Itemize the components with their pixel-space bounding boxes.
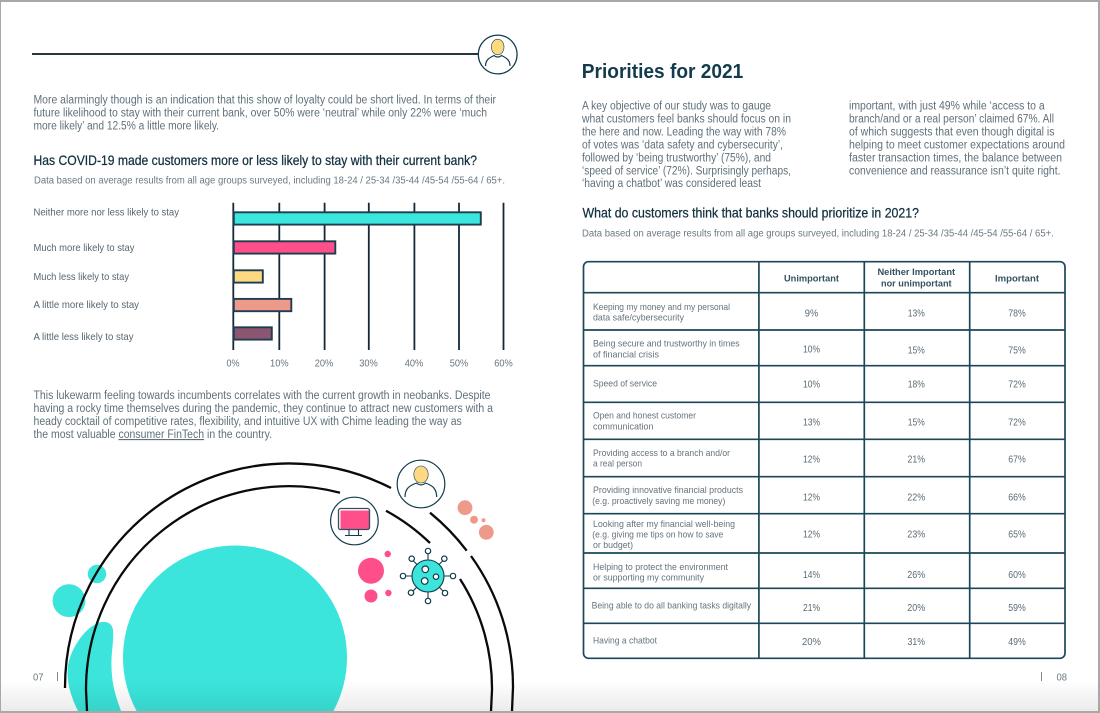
row: financial well-being: 65%	[1008, 528, 1026, 540]
row: innovative products: 66%	[1008, 492, 1026, 504]
body text column 1: of votes was ‘data safety and cybersecurity’,	[582, 139, 783, 151]
bar: little less	[234, 327, 272, 340]
row: digital tasks: Being able to do all banking tasks digitally	[592, 600, 751, 611]
row: branch access: Providing access to a branch and/or	[593, 448, 730, 459]
table header: Important	[995, 274, 1040, 284]
bar chart	[34, 203, 513, 369]
row: financial well-being: 12%	[803, 528, 820, 540]
body text column 1: followed by ‘being trustworthy’ (75%), and	[582, 152, 771, 164]
closing paragraph: heady cocktail of competitive rates, flexibility, and intuitive UX with Chime leading the way as	[34, 416, 462, 428]
closing paragraph: the most valuable consumer FinTech in the country.	[34, 429, 272, 441]
axis labels: 30%	[359, 357, 378, 369]
salmon dots	[458, 500, 494, 540]
row: environment: 26%	[907, 569, 925, 581]
category labels: Much less likely to stay	[34, 271, 130, 283]
inner orbit	[86, 486, 492, 711]
row: communication: 13%	[803, 416, 820, 428]
row: financial well-being	[592, 519, 1026, 551]
row: speed	[593, 378, 1026, 390]
row: communication	[593, 411, 1026, 432]
icon: person	[397, 460, 445, 508]
row: digital tasks: 20%	[907, 602, 925, 614]
row: environment: 14%	[803, 569, 820, 581]
row: trustworthy: 75%	[1008, 345, 1026, 357]
row: communication: 15%	[908, 416, 925, 428]
row: data safety: data safe/cybersecurity	[593, 312, 684, 323]
body text column 1	[581, 100, 791, 190]
row: branch access	[593, 448, 1026, 470]
row: chatbot: Having a chatbot	[593, 635, 657, 646]
body text column 2: of which suggests that even though digital is	[849, 126, 1055, 138]
row: branch access: 21%	[908, 454, 925, 466]
body text column 2: helping to meet customer expectations around	[849, 139, 1065, 151]
row: speed: 10%	[803, 378, 820, 390]
axis labels: 40%	[405, 357, 423, 369]
intro paragraph: future likelihood to stay with their current bank, over 50% were ‘neutral’ while only 22% were ‘much	[34, 108, 487, 120]
row: data safety: 13%	[908, 308, 925, 320]
row: trustworthy	[593, 338, 1026, 360]
body text column 1: ‘having a chatbot’ was considered least	[582, 178, 762, 190]
row: branch access: 67%	[1008, 454, 1026, 466]
row: speed: 72%	[1008, 378, 1026, 390]
teal blob	[67, 622, 121, 711]
row: innovative products: Providing innovative financial products	[593, 485, 743, 496]
row: data safety: 78%	[1008, 308, 1026, 320]
page number right: 08	[1056, 672, 1067, 683]
table header: Unimportant	[784, 274, 840, 284]
small teal circles	[53, 565, 106, 617]
icon: person in circle	[478, 35, 517, 74]
row: chatbot: 49%	[1008, 636, 1026, 648]
body text column 2: important, with just 49% while ‘access to a	[849, 100, 1045, 112]
body text column 1: ‘speed of service’ (72%). Surprisingly perhaps,	[582, 165, 791, 177]
pink dots	[358, 551, 392, 602]
category labels: A little more likely to stay	[34, 299, 140, 311]
axis labels: 0%	[226, 357, 240, 369]
row: trustworthy: Being secure and trustworthy in times	[593, 338, 740, 349]
category labels: Neither more nor less likely to stay	[34, 206, 180, 218]
row: digital tasks: 21%	[803, 602, 820, 614]
axis labels: 10%	[270, 357, 289, 369]
row: environment: 60%	[1008, 569, 1026, 581]
row: environment	[593, 562, 1026, 583]
row: innovative products: 22%	[907, 492, 925, 504]
row: data safety: 9%	[805, 308, 818, 320]
row: chatbot: 20%	[802, 636, 821, 648]
icon: monitor	[331, 497, 378, 545]
body text column 2: faster transaction times, the balance between	[849, 152, 1062, 164]
row: data safety	[593, 302, 1026, 323]
bar: much less	[234, 270, 263, 283]
axis labels: 50%	[450, 357, 468, 369]
table header: nor unimportant	[881, 278, 952, 290]
row: speed: Speed of service	[593, 379, 657, 390]
row: innovative products: 12%	[803, 492, 820, 504]
row: financial well-being: or budget)	[593, 540, 633, 551]
row: trustworthy: of financial crisis	[593, 349, 659, 360]
body text column 1: what customers feel banks should focus on in	[581, 114, 791, 126]
body text column 2: branch/and or a real person’ claimed 67%. All	[849, 114, 1054, 126]
row: environment: or supporting my community	[593, 572, 704, 583]
intro paragraph: more likely’ and 12.5% a little more likely.	[34, 120, 219, 132]
row: innovative products	[592, 485, 1026, 507]
axis labels	[226, 357, 513, 369]
row: communication: 72%	[1008, 416, 1026, 428]
chart heading: Has COVID-19 made customers more or less likely to stay with their current bank?	[34, 152, 477, 168]
category labels: A little less likely to stay	[34, 331, 134, 343]
row: environment: Helping to protect the environment	[593, 562, 728, 573]
closing paragraph: having a rocky time themselves during the pandemic, they continue to attract new customers with a	[34, 403, 494, 415]
row: chatbot	[593, 635, 1026, 648]
body text column 2	[849, 100, 1065, 177]
row: digital tasks: 59%	[1008, 602, 1026, 614]
table header	[784, 267, 1040, 290]
page number left: 07	[33, 672, 44, 683]
row: trustworthy: 15%	[908, 345, 925, 357]
row: speed: 18%	[908, 378, 925, 390]
category labels: Much more likely to stay	[34, 242, 135, 254]
large teal circle	[123, 546, 347, 711]
body text column 2: convenience and reassurance isn’t quite right.	[849, 165, 1060, 177]
axis labels: 60%	[494, 357, 513, 369]
row: innovative products: (e.g. proactively saving me money)	[592, 496, 725, 507]
bar: little more	[234, 299, 291, 311]
closing paragraph: This lukewarm feeling towards incumbents correlates with the current growth in neobanks. Despite	[34, 390, 490, 402]
page number left	[33, 672, 58, 683]
panel: left page	[32, 35, 517, 711]
row: trustworthy: 10%	[803, 344, 820, 356]
bar: neither	[234, 212, 481, 225]
header rule with person icon	[32, 35, 517, 74]
table header: Neither Important	[877, 267, 956, 278]
body text column 1: the here and now. Leading the way with 78%	[582, 126, 786, 138]
table subheading: Data based on average results from all age groups surveyed, including 18-24 / 25-34 /35-44 /45-54 /55-64 / 65+.	[582, 228, 1054, 239]
row: branch access: a real person	[593, 459, 642, 470]
title: Priorities for 2021	[582, 61, 743, 83]
row: communication: communication	[593, 421, 654, 432]
icon: virus	[400, 548, 456, 604]
row: communication: Open and honest customer	[593, 411, 696, 422]
illustration: orbiting circles	[53, 460, 513, 711]
bar: much more	[234, 241, 335, 254]
closing paragraph	[34, 390, 494, 441]
outer orbit	[65, 463, 513, 711]
table grid	[584, 262, 1065, 658]
table heading: What do customers think that banks should prioritize in 2021?	[582, 205, 919, 221]
row: financial well-being: Looking after my financial well-being	[593, 519, 735, 530]
intro paragraph	[34, 94, 496, 132]
row: financial well-being: (e.g. giving me tips on how to save	[592, 529, 723, 540]
axis labels: 20%	[315, 357, 333, 369]
row: financial well-being: 23%	[907, 528, 925, 540]
body text column 1: A key objective of our study was to gauge	[582, 100, 771, 112]
row: digital tasks	[592, 600, 1026, 614]
page number right	[1042, 672, 1067, 683]
row: branch access: 12%	[803, 454, 820, 466]
row: data safety: Keeping my money and my personal	[593, 302, 730, 313]
row: chatbot: 31%	[908, 636, 925, 648]
table	[584, 262, 1065, 658]
category labels	[34, 206, 180, 343]
chart subheading: Data based on average results from all age groups surveyed, including 18-24 / 25-34 /35-44 /45-54 /55-64 / 65+.	[34, 176, 505, 186]
intro paragraph: More alarmingly though is an indication that this show of loyalty could be short lived. In terms of their	[34, 94, 496, 106]
panel: right page	[581, 61, 1067, 683]
